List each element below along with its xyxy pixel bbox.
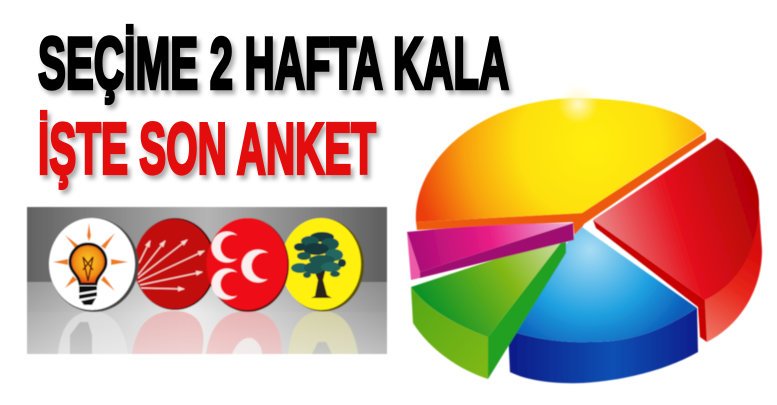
- icon: sun rays: [53, 223, 128, 291]
- slice: blue: [508, 227, 698, 383]
- icon: three crescents: [212, 232, 278, 300]
- logo: light bulb party: [49, 218, 138, 312]
- logo reflections: [58, 311, 358, 354]
- subtitle: İşte son anket: İŞTE SON ANKET: [38, 110, 376, 190]
- slice: green: [411, 236, 566, 379]
- slice: magenta: [407, 223, 574, 280]
- chart: 3D pie: [407, 84, 762, 383]
- icon: bulb: [70, 244, 106, 284]
- slice: yellow: [416, 84, 706, 240]
- logo: white crescents party: [206, 218, 289, 312]
- icon: tree: [291, 232, 346, 298]
- panel: party logos: [27, 207, 387, 354]
- logo: yellow tree party: [281, 218, 364, 312]
- slice: red: [593, 138, 762, 342]
- icon: six arrows: [138, 240, 204, 289]
- red slice cut face: [593, 220, 707, 342]
- panel background: [27, 207, 387, 354]
- logo: red arrows party: [134, 218, 216, 310]
